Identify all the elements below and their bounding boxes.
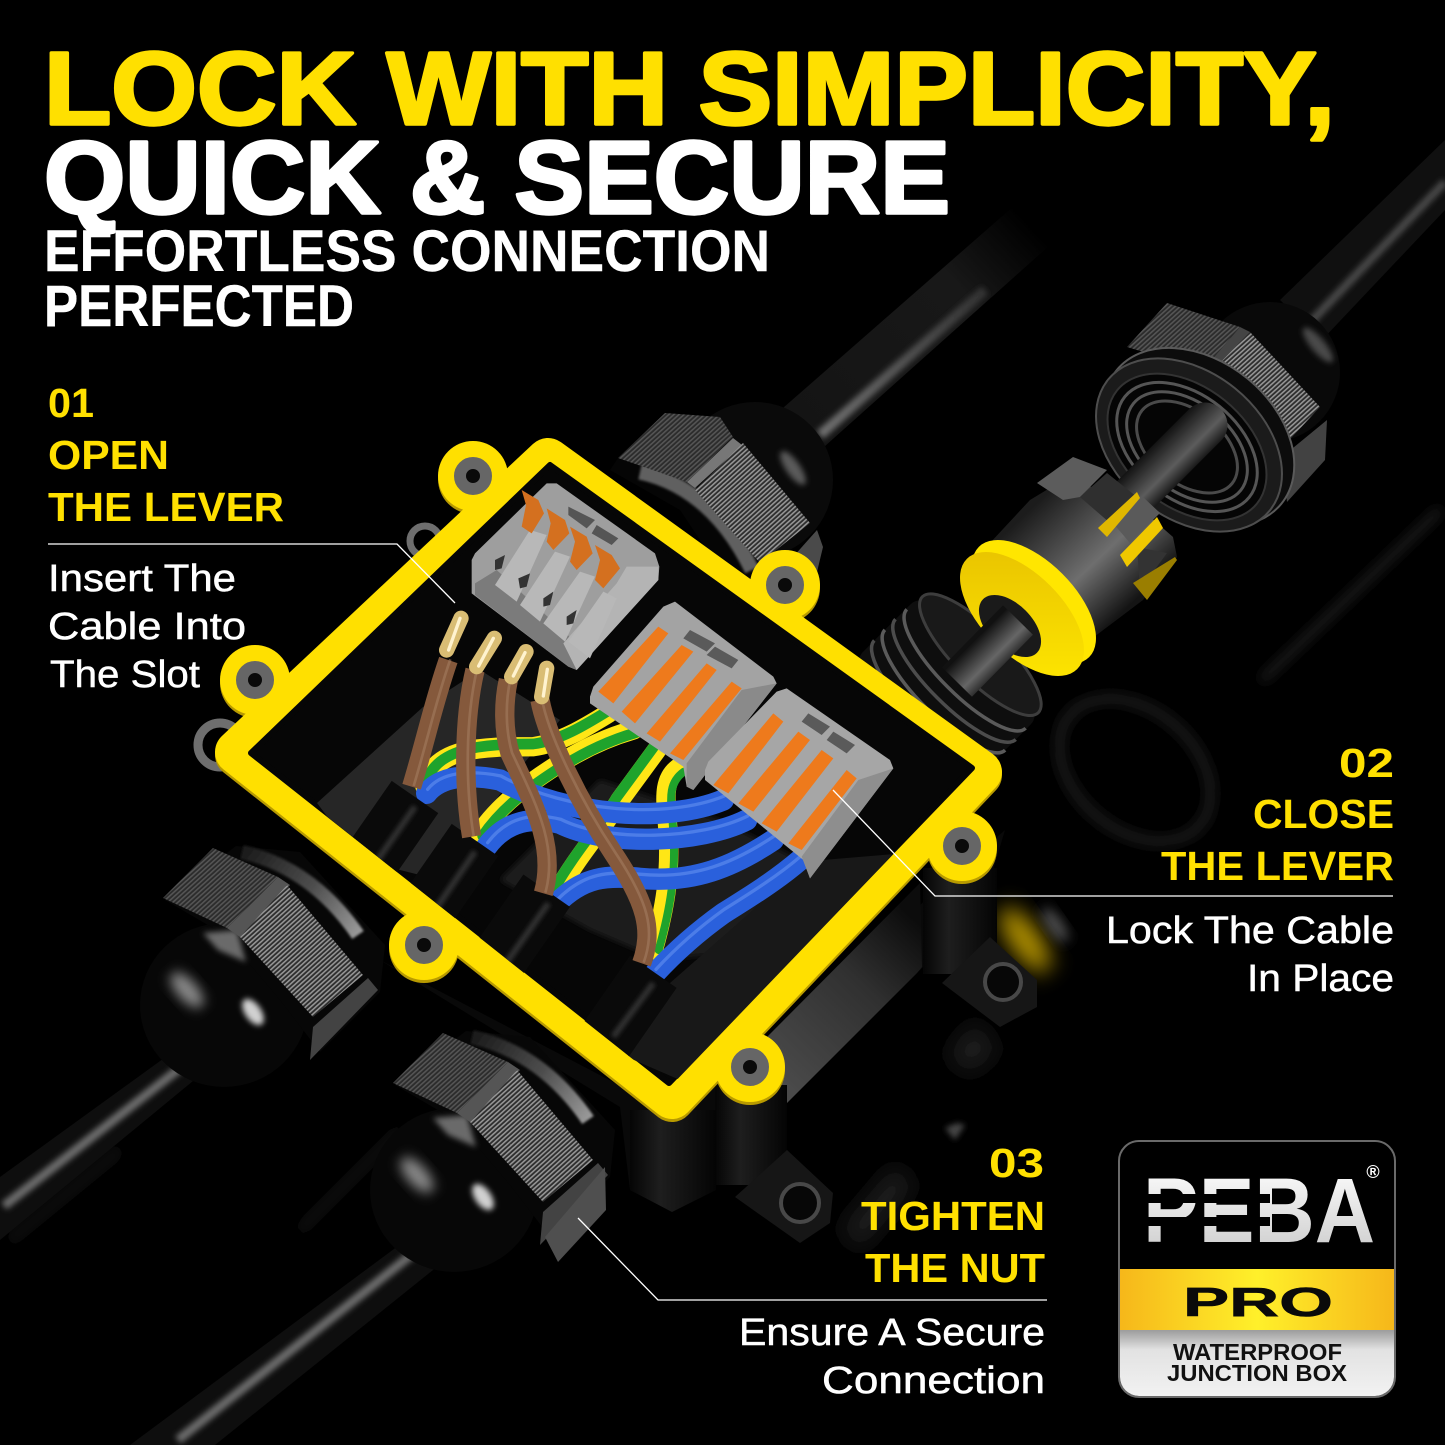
lower front cable — [130, 1217, 443, 1445]
yellow band — [1120, 1269, 1394, 1330]
lower front cable gland — [370, 1031, 615, 1272]
brand badge — [1119, 1141, 1395, 1397]
pro label: PRO — [1183, 1279, 1333, 1325]
product name: JUNCTION BOX — [1167, 1360, 1348, 1386]
step 03 text: 03 — [989, 1140, 1044, 1186]
sealing barrel with claws — [990, 457, 1177, 640]
top right cable — [1280, 140, 1445, 340]
green and yellow earth wires — [425, 711, 684, 950]
mounting foot left — [198, 723, 242, 767]
step 03 text — [739, 1140, 1045, 1402]
step 02 text: In Place — [1247, 958, 1394, 1000]
step 02 text: Lock The Cable — [1106, 910, 1394, 952]
silver footer — [1120, 1330, 1394, 1396]
bare copper tips — [447, 618, 547, 697]
mounting foot top — [410, 526, 440, 556]
open lever connector — [472, 483, 659, 670]
step 02 text: 02 — [1339, 740, 1394, 786]
step 01 text: Insert The — [48, 558, 236, 600]
step 01 text: 01 — [48, 380, 94, 426]
registered mark: ® — [1366, 1162, 1380, 1182]
brown wire highlights — [414, 659, 649, 963]
copper tip highlights — [449, 618, 547, 696]
product name: WATERPROOF — [1173, 1339, 1342, 1365]
box interior with wiring — [317, 483, 907, 1108]
box body walls and posts — [380, 830, 1005, 1212]
subtitle — [44, 219, 770, 339]
callout line 01 — [48, 544, 455, 603]
step 03 text: TIGHTEN — [861, 1193, 1045, 1239]
step 02 text: THE LEVER — [1161, 843, 1394, 889]
yellow frame — [220, 441, 997, 1105]
step 01 text: OPEN — [48, 432, 169, 478]
brown wires — [412, 660, 647, 963]
yellow sealing ring — [939, 519, 1117, 697]
subtitle: EFFORTLESS CONNECTION — [44, 219, 770, 284]
step 02 text: CLOSE — [1253, 791, 1394, 837]
step 01 text: Cable Into — [48, 606, 246, 648]
lower left cable gland — [140, 846, 385, 1087]
step 01 text: THE LEVER — [48, 484, 284, 530]
blue wire highlights — [428, 773, 801, 969]
callout line 03 — [578, 1218, 1047, 1300]
frame screw holes — [242, 463, 975, 1080]
upper cable — [775, 205, 1050, 455]
step 01 text: The Slot — [50, 654, 200, 696]
faint background reflections — [10, 510, 1440, 1240]
sheath highlights — [340, 807, 653, 1037]
top gland nut — [610, 402, 833, 600]
title: QUICK & SECURE — [44, 120, 950, 235]
title — [44, 31, 1335, 235]
closed lever connector middle — [590, 602, 777, 790]
subtitle: PERFECTED — [44, 274, 354, 339]
title: LOCK WITH SIMPLICITY, — [44, 31, 1335, 146]
product name — [1167, 1339, 1348, 1386]
mounting foot right — [942, 937, 1037, 1027]
lower left cable — [0, 1027, 210, 1240]
step 01 text — [48, 380, 284, 696]
right threaded stub — [853, 576, 1059, 782]
cable through ring — [957, 620, 1018, 682]
brand logo: PEBA — [1143, 1160, 1375, 1262]
step 03 text: Ensure A Secure — [739, 1312, 1045, 1354]
step 03 text: Connection — [822, 1360, 1045, 1402]
blue wires — [427, 777, 800, 973]
floor shading — [317, 670, 907, 1080]
open gland nut — [1062, 302, 1340, 567]
mounting foot bottom — [735, 1150, 833, 1243]
callout line 02 — [833, 790, 1393, 896]
step 02 text — [1106, 740, 1394, 1000]
cable inside nut — [1125, 425, 1205, 505]
step 03 text: THE NUT — [865, 1245, 1045, 1291]
closed lever connector right — [705, 688, 893, 878]
black sheaths — [353, 781, 676, 1056]
